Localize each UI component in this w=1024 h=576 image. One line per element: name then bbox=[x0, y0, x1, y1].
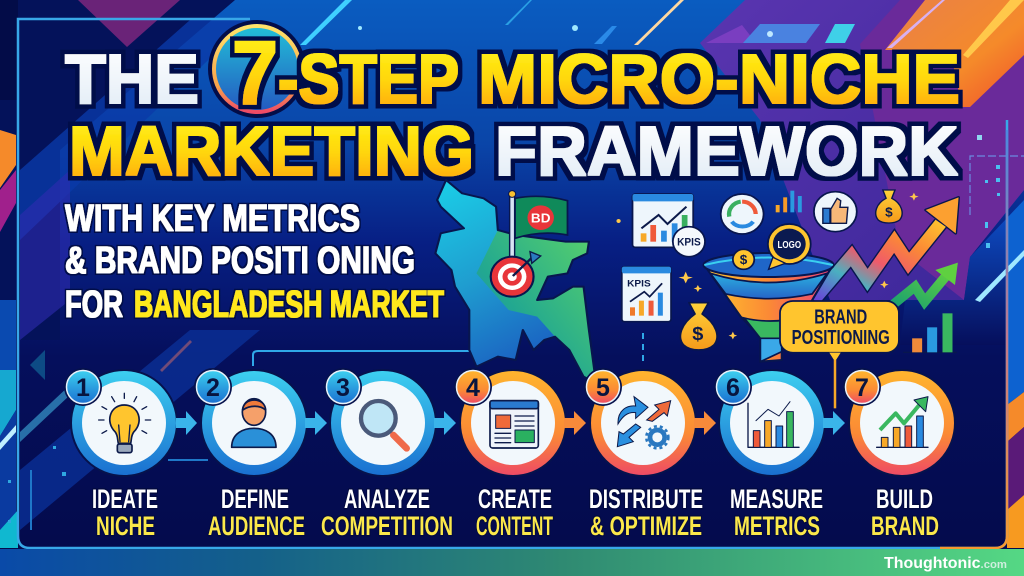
flag: BD bbox=[531, 211, 551, 225]
arrow 2 bbox=[305, 411, 327, 435]
title number: 7: 7 bbox=[232, 24, 278, 124]
money bag small bbox=[876, 190, 902, 223]
label: Measure Metrics: METRICS bbox=[734, 511, 820, 541]
step 7 circle bbox=[849, 370, 955, 476]
badge 6 bbox=[714, 368, 752, 406]
label: Create Content bbox=[476, 484, 553, 541]
brand positioning callout: BRAND bbox=[814, 306, 867, 328]
icon: web page content bbox=[490, 401, 538, 448]
title word: -STEP: -STEP bbox=[278, 40, 459, 118]
illustration cluster bbox=[435, 180, 959, 408]
subtitle: BANGLADESH MARKET bbox=[134, 284, 444, 326]
subtitle: WITH KEY METRICS bbox=[65, 198, 360, 240]
badge 5: 5 bbox=[596, 374, 610, 402]
badge 4 bbox=[454, 368, 492, 406]
badge 1 bbox=[64, 368, 102, 406]
label: Ideate Niche: IDEATE bbox=[92, 484, 158, 514]
label: Ideate Niche bbox=[92, 484, 158, 541]
arrow 3 bbox=[434, 411, 456, 435]
badge: 7 circle bbox=[208, 20, 306, 118]
map of Bangladesh bbox=[435, 180, 596, 383]
KPI bubble: KPIS bbox=[677, 237, 701, 249]
step 3 circle bbox=[330, 370, 436, 476]
badge 4: 4 bbox=[466, 374, 480, 402]
title word: MICRO-NICHE: MICRO-NICHE bbox=[478, 40, 960, 118]
target bbox=[491, 252, 541, 297]
label: Analyze Competition: ANALYZE bbox=[344, 484, 430, 514]
subtitle bbox=[65, 198, 444, 326]
KPI dashboard 2 bbox=[622, 267, 671, 322]
label: Analyze Competition: COMPETITION bbox=[321, 511, 453, 541]
coin bbox=[733, 249, 754, 269]
label: Define Audience: AUDIENCE bbox=[208, 511, 305, 541]
money bag small: $ bbox=[885, 205, 893, 220]
funnel bbox=[704, 253, 834, 362]
title word: THE: THE bbox=[65, 40, 199, 118]
label: Distribute & Optimize bbox=[589, 484, 703, 541]
label: Create Content: CONTENT bbox=[476, 511, 553, 541]
step 2 circle bbox=[201, 370, 307, 476]
KPI dashboard 2: KPIS bbox=[627, 279, 651, 290]
step 5 circle bbox=[590, 370, 696, 476]
label: Build Brand bbox=[871, 484, 939, 541]
badge 2: 2 bbox=[206, 374, 220, 402]
badge 7: 7 bbox=[855, 374, 869, 402]
connector line bbox=[253, 351, 470, 366]
title word: FRAMEWORK: FRAMEWORK bbox=[495, 112, 958, 190]
icon: growth chart bbox=[877, 397, 928, 447]
logo bubble: LOGO bbox=[777, 240, 801, 251]
footer brand: Thoughtonic.com bbox=[884, 555, 1007, 572]
dashed connector bbox=[642, 333, 644, 366]
badge 3: 3 bbox=[336, 374, 350, 402]
badge 7 bbox=[843, 368, 881, 406]
badge 5 bbox=[584, 368, 622, 406]
label: Measure Metrics bbox=[730, 484, 823, 541]
KPI dashboard 1 bbox=[632, 194, 693, 247]
label: Measure Metrics: MEASURE bbox=[730, 484, 823, 514]
flag bbox=[509, 191, 567, 262]
icon: magnifier bbox=[361, 401, 407, 448]
step 6 circle bbox=[719, 370, 825, 476]
decorative sparkles bbox=[616, 193, 919, 339]
money bag large: $ bbox=[692, 324, 704, 345]
label: Distribute & Optimize: & OPTIMIZE bbox=[590, 511, 702, 541]
money bag large bbox=[680, 303, 717, 350]
badge 2 bbox=[194, 368, 232, 406]
icon: light bulb bbox=[99, 393, 151, 453]
mini bars bbox=[776, 191, 802, 212]
logo bubble bbox=[768, 224, 811, 269]
title bbox=[65, 20, 960, 190]
label: Build Brand: BRAND bbox=[871, 511, 939, 541]
label: Build Brand: BUILD bbox=[876, 484, 933, 514]
step 1 circle bbox=[71, 370, 177, 476]
icon: person bbox=[232, 399, 276, 447]
brand positioning callout bbox=[780, 301, 899, 408]
brand positioning callout: POSITIONING bbox=[792, 327, 890, 349]
thumbs up icon bbox=[814, 192, 857, 232]
loop icon bbox=[721, 194, 764, 234]
badge 3 bbox=[324, 368, 362, 406]
label: Distribute & Optimize: DISTRIBUTE bbox=[589, 484, 703, 514]
footer band bbox=[0, 549, 1024, 576]
arrow 6 bbox=[823, 411, 845, 435]
arrow 1 bbox=[176, 411, 197, 435]
badge 1: 1 bbox=[76, 374, 90, 402]
subtitle: & BRAND POSITI ONING bbox=[65, 240, 415, 282]
coin: $ bbox=[740, 252, 748, 267]
arrow 4 bbox=[564, 411, 586, 435]
subtitle: FOR bbox=[65, 284, 123, 326]
icon: distribute arrows and gear bbox=[617, 397, 671, 448]
arrow 5 bbox=[694, 411, 716, 435]
badge 6: 6 bbox=[726, 374, 740, 402]
icon: bar chart with line bbox=[748, 402, 799, 447]
step 4 circle bbox=[460, 370, 566, 476]
label: Define Audience bbox=[208, 484, 305, 541]
title word: MARKETING: MARKETING bbox=[69, 112, 474, 190]
label: Analyze Competition bbox=[321, 484, 453, 541]
label: Define Audience: DEFINE bbox=[221, 484, 289, 514]
KPI bubble bbox=[673, 227, 705, 257]
label: Ideate Niche: NICHE bbox=[96, 511, 155, 541]
mini bar chart bbox=[903, 313, 957, 352]
green growth arrow bbox=[892, 263, 958, 305]
growth arrow bbox=[814, 197, 959, 300]
label: Create Content: CREATE bbox=[478, 484, 552, 514]
